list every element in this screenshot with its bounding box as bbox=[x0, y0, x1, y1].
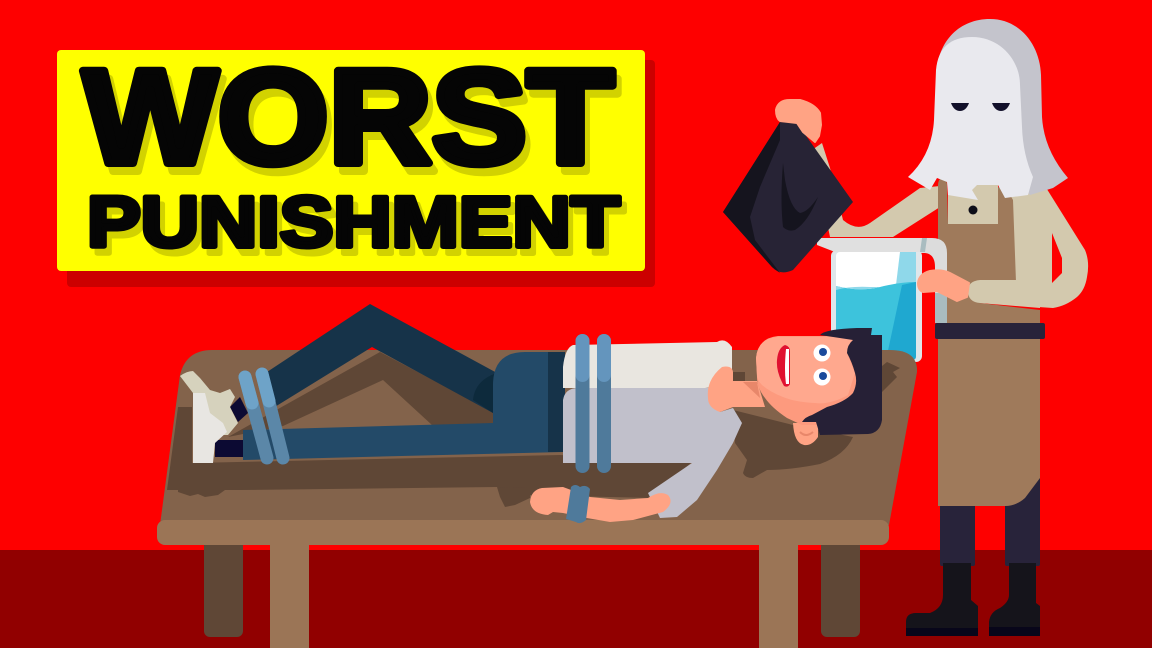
eyes bbox=[814, 344, 830, 386]
ear bbox=[793, 423, 818, 445]
face bbox=[756, 336, 860, 425]
shadow of body on table bbox=[167, 352, 900, 507]
title panel bbox=[57, 43, 655, 287]
arm and hand bbox=[530, 485, 671, 523]
back table legs bbox=[204, 540, 243, 637]
heading: PUNISHMENT: PUNISHMENT bbox=[92, 190, 625, 270]
pitcher of water bbox=[817, 238, 947, 362]
hand holding bag bbox=[776, 100, 821, 142]
apron skirt bbox=[938, 335, 1040, 506]
shirt bbox=[563, 340, 742, 518]
pitcher rim bbox=[817, 238, 925, 252]
bag fold bbox=[782, 163, 818, 231]
belt bbox=[935, 323, 1045, 339]
shirt button bbox=[968, 206, 978, 214]
hand on pitcher bbox=[918, 270, 969, 301]
mouth bbox=[777, 345, 790, 387]
executioner legs and boots bbox=[906, 470, 1040, 636]
hood bbox=[908, 19, 1068, 200]
far arm bbox=[812, 143, 940, 237]
wrist rope bbox=[566, 485, 590, 523]
executioner bbox=[812, 19, 1088, 636]
shirt torso and near arm bbox=[968, 178, 1088, 308]
shoes bbox=[180, 371, 238, 463]
table top bbox=[160, 350, 917, 525]
flat leg and hips bbox=[215, 352, 565, 460]
table bbox=[157, 350, 917, 648]
forearm over apron bbox=[968, 280, 1040, 308]
raised leg bbox=[230, 304, 497, 422]
shirt collar bbox=[948, 185, 998, 224]
table plank bbox=[157, 520, 889, 545]
water bbox=[836, 282, 916, 360]
ankle ropes bbox=[245, 374, 283, 458]
floor bbox=[0, 550, 1152, 648]
apron bib bbox=[938, 178, 1040, 325]
waist ropes bbox=[582, 341, 604, 466]
prisoner bbox=[180, 304, 882, 523]
head shadow bbox=[733, 410, 853, 478]
pitcher body bbox=[831, 250, 922, 362]
arm gap bbox=[1052, 233, 1062, 283]
hair bbox=[802, 328, 882, 435]
black bag bbox=[723, 100, 853, 273]
neck and shoulder bbox=[708, 367, 765, 412]
head bbox=[756, 328, 882, 445]
hood eyes bbox=[951, 103, 1010, 111]
heading: WORST: WORST bbox=[88, 51, 619, 200]
front table legs bbox=[270, 545, 309, 648]
heading: PUNISHMENT: PUNISHMENT bbox=[87, 184, 620, 262]
heading: WORST: WORST bbox=[83, 43, 614, 192]
pitcher handle bbox=[915, 238, 947, 323]
